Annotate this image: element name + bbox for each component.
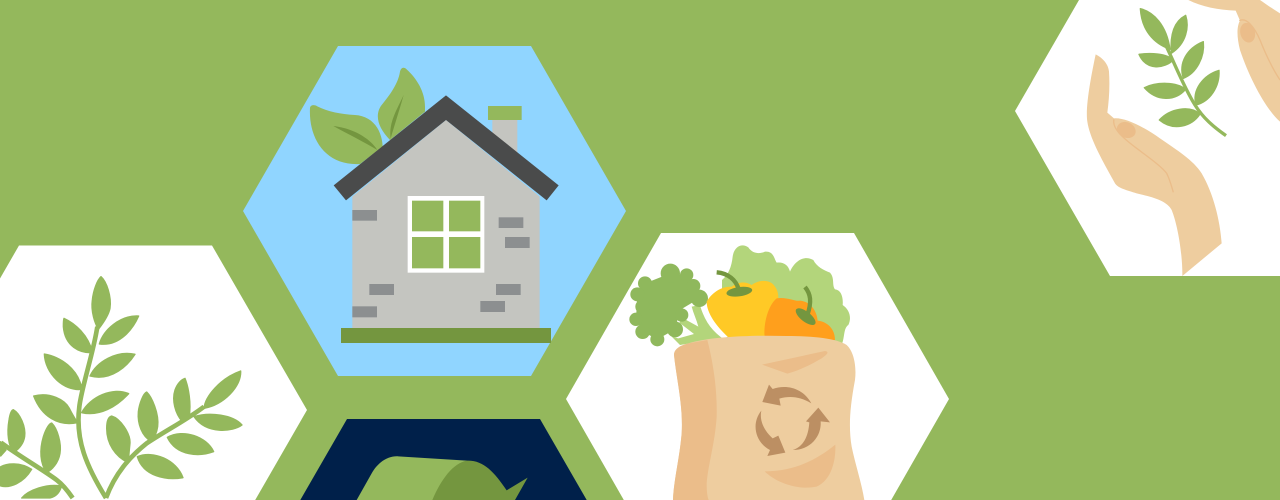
pepper stems [717,272,818,328]
panel: hands hexagon [1015,0,1280,276]
upper hand [1188,0,1280,122]
panel: house hexagon [243,46,626,376]
bag shaded side [673,340,717,500]
leaves behind house [310,68,425,164]
icon: branching plant [1,277,242,498]
bricks [352,210,530,317]
panel: grocery bag hexagon [566,233,949,500]
panel: recycling hexagon [300,419,587,500]
window [408,196,484,273]
icon: house with leaves [310,68,559,343]
ground strip [341,328,551,343]
blue hexagon [243,46,626,376]
panel: plant hexagon [0,246,307,500]
sprig [1139,9,1226,136]
orange pepper [764,298,835,340]
broccoli [629,264,728,346]
icon: grocery bag with vegetables [629,245,864,500]
white hexagon [1015,0,1280,276]
lettuce [722,245,850,345]
white hexagon [0,246,307,500]
white gap beside pepper [703,308,726,338]
icon: recycling ribbon [357,456,528,500]
paper bag [673,336,864,500]
recycle symbol [756,385,830,456]
bag creases [762,351,835,488]
white hexagon [566,233,949,500]
roof [334,95,559,200]
chimney [488,106,522,157]
house body [352,120,540,328]
yellow pepper [707,281,778,338]
icon: hands protecting sprig [1087,0,1280,276]
lower hand [1087,54,1222,276]
navy hexagon [300,419,587,500]
